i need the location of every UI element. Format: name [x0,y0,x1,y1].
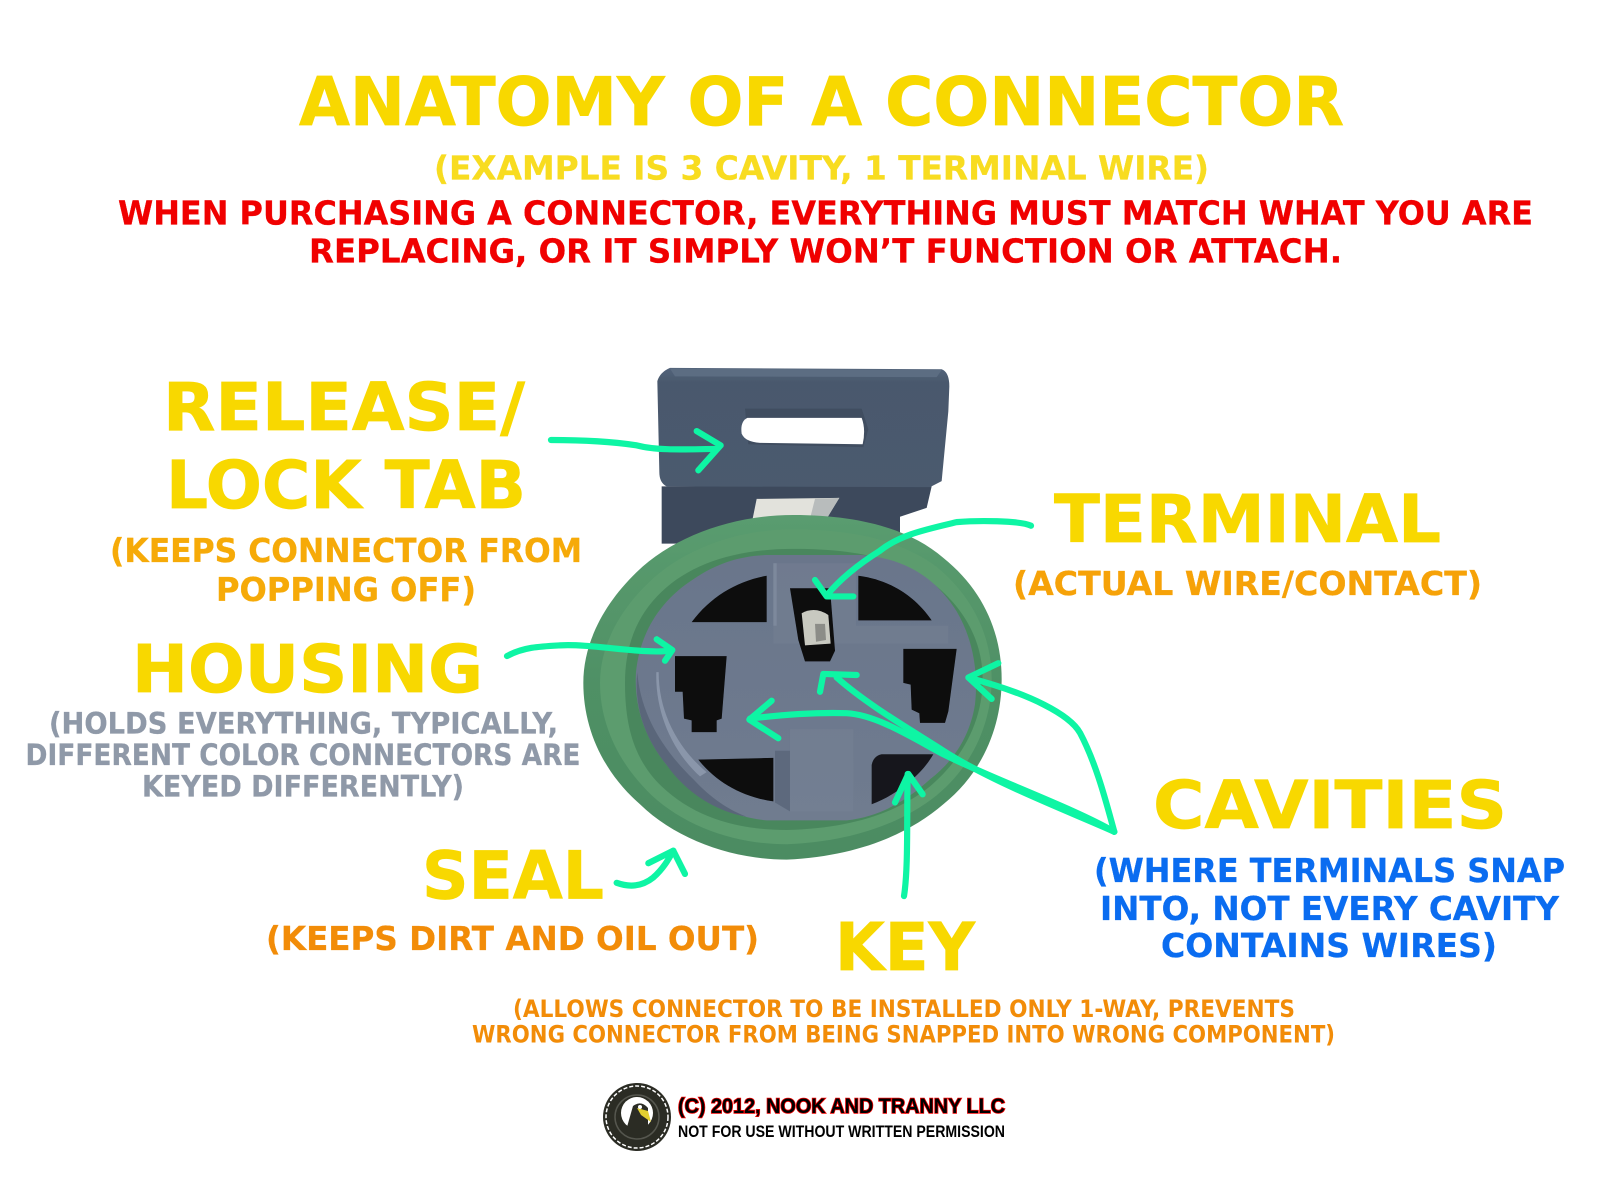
red warning: WHEN PURCHASING A CONNECTOR, EVERYTHING MUST MATCH WHAT YOU ARE [118,194,1533,232]
copyright [678,1095,1005,1141]
green seal [583,515,1002,860]
label: key: KEY [835,909,976,986]
arrow: cavity right [968,663,1114,832]
label: cavities [1094,767,1565,965]
label: housing [26,631,580,804]
label: key: (ALLOWS CONNECTOR TO BE INSTALLED ONLY 1-WAY, PREVENTS [513,995,1295,1023]
label: cavities: INTO, NOT EVERY CAVITY [1100,889,1560,928]
terminal [790,588,835,661]
label: housing: DIFFERENT COLOR CONNECTORS ARE [26,738,580,772]
red warning [118,194,1533,270]
label: key: WRONG CONNECTOR FROM BEING SNAPPED INTO WRONG COMPONENT) [472,1020,1335,1048]
label: housing: (HOLDS EVERYTHING, TYPICALLY, [49,706,558,740]
arrow: cavity left [749,701,1114,832]
label: terminal [1013,481,1482,603]
copyright: NOT FOR USE WITHOUT WRITTEN PERMISSION [678,1122,1005,1141]
label: release lock tab [110,369,582,609]
arrow: seal [617,851,685,886]
label: seal: (KEEPS DIRT AND OIL OUT) [266,919,759,958]
title: ANATOMY OF A CONNECTOR [299,63,1344,141]
label: seal: SEAL [422,838,604,914]
gray housing [636,555,976,820]
label: cavities: CAVITIES [1153,767,1507,844]
label: cavities: (WHERE TERMINALS SNAP [1094,851,1565,890]
cavities [675,576,957,804]
arrow: terminal [815,521,1031,596]
label: housing: HOUSING [132,631,483,708]
subtitle: (EXAMPLE IS 3 CAVITY, 1 TERMINAL WIRE) [434,148,1209,188]
label: release lock tab: (KEEPS CONNECTOR FROM [110,531,582,570]
label: release lock tab: RELEASE/ [163,369,526,446]
red warning: REPLACING, OR IT SIMPLY WON’T FUNCTION OR ATTACH. [309,232,1342,270]
label: release lock tab: POPPING OFF) [216,570,476,609]
label: housing: KEYED DIFFERENTLY) [142,770,464,804]
label: terminal: TERMINAL [1054,481,1441,558]
label: key [472,909,1335,1048]
annotation arrows [507,431,1114,896]
connector photo [583,368,1002,860]
arrow: housing [507,639,672,661]
label: terminal: (ACTUAL WIRE/CONTACT) [1013,564,1482,603]
release tab body [657,368,949,544]
icon: logo badge [603,1083,671,1151]
arrow: cavity center [820,674,1114,832]
arrow: release tab [551,431,721,470]
label: release lock tab: LOCK TAB [166,447,526,524]
label: seal [266,838,759,958]
label: cavities: CONTAINS WIRES) [1161,926,1497,965]
copyright: (C) 2012, NOOK AND TRANNY LLC [678,1095,1005,1118]
arrow: key [895,774,923,896]
